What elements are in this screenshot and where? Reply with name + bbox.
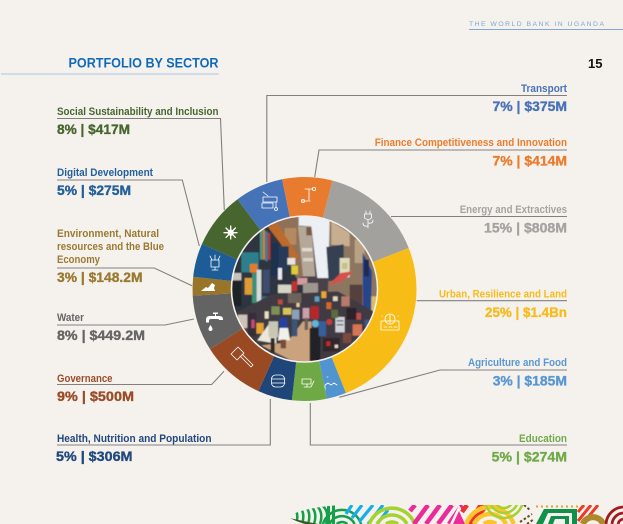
label: water: Water: [57, 312, 85, 324]
label: governance: 9% | $500M: [57, 388, 134, 404]
label: digital development: Digital Development: [57, 167, 153, 179]
label: agriculture: [339, 357, 567, 397]
label: agriculture: Agriculture and Food: [468, 357, 567, 369]
segment: governance: [210, 328, 274, 391]
label: education: Education: [519, 433, 567, 445]
segment: urban: [331, 248, 417, 393]
segment: education: [292, 361, 327, 401]
label: finance: [315, 137, 567, 177]
label: urban: 25% | $1.4Bn: [485, 304, 567, 320]
label: energy: 15% | $808M: [484, 220, 567, 236]
decorative pattern band: [290, 505, 623, 524]
segment: water: [193, 293, 243, 349]
segment: social: [202, 199, 261, 260]
label: water: [57, 312, 194, 343]
title: PORTFOLIO BY SECTOR: [68, 56, 219, 70]
label: transport: 7% | $375M: [492, 98, 567, 114]
label: finance: Finance Competitiveness and Innovation: [375, 137, 567, 149]
label: governance: [57, 371, 224, 404]
segment: environment: [192, 277, 232, 296]
label: urban: Urban, Resilience and Land: [439, 288, 567, 300]
segment: digital: [193, 244, 238, 281]
label: energy: Energy and Extractives: [460, 204, 567, 216]
label: agriculture: 3% | $185M: [493, 372, 567, 388]
photo ring: [232, 216, 378, 362]
label: governance: Governance: [57, 373, 112, 385]
label: urban: [417, 288, 567, 320]
label: digital development: [57, 167, 199, 246]
label: transport: [267, 83, 567, 182]
label: digital development: 5% | $275M: [57, 182, 131, 198]
label: transport: Transport: [521, 83, 567, 95]
header: report name: THE WORLD BANK IN UGANDA: [469, 21, 604, 28]
label: health: Health, Nutrition and Population: [57, 433, 212, 445]
segment: health: [258, 356, 296, 400]
segment: energy: [323, 181, 409, 262]
label: social sustainability: Social Sustainability and Inclusion: [57, 106, 219, 118]
label: environment: Environment, Natural: [57, 228, 159, 240]
label: education: 5% | $274M: [492, 448, 567, 464]
label: education: [310, 403, 567, 464]
segment: finance: [282, 177, 333, 218]
donut chart: [192, 177, 417, 401]
segment: agriculture: [319, 357, 346, 399]
segment: transport: [237, 179, 290, 231]
label: environment: [57, 228, 192, 286]
label: water: 8% | $449.2M: [57, 327, 145, 343]
label: health: [56, 399, 270, 464]
photo: busy market street: [232, 217, 377, 362]
label: health: 5% | $306M: [56, 448, 132, 464]
label: finance: 7% | $414M: [492, 152, 567, 168]
label: social sustainability: 8% | $417M: [57, 121, 130, 137]
label: social sustainability: [57, 106, 224, 210]
label: environment: 3% | $148.2M: [57, 269, 142, 285]
label: environment: Economy: [57, 254, 101, 266]
page number: 15: [588, 56, 602, 71]
label: energy: [391, 204, 567, 236]
label: environment: resources and the Blue: [57, 241, 164, 253]
